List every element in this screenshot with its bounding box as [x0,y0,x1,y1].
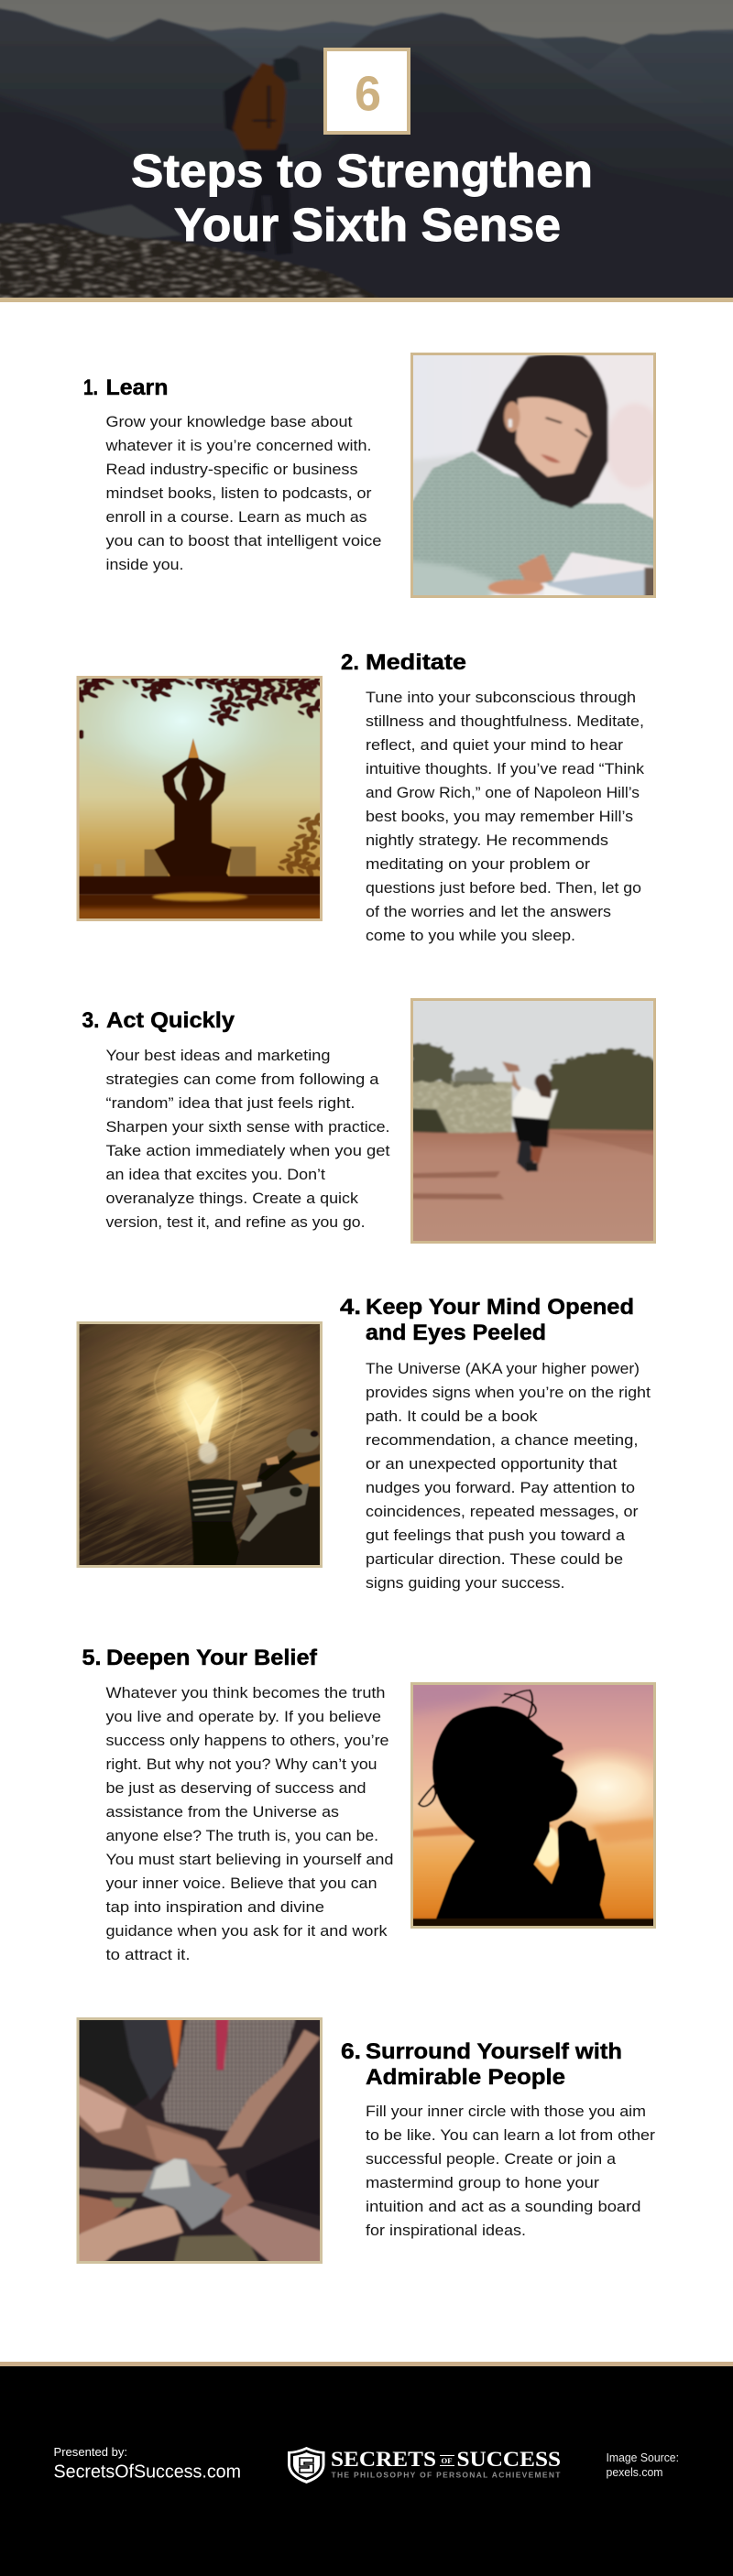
panel: step 1 learn [83,342,671,607]
body text: Your best ideas and marketing [106,1047,330,1064]
body text: “random” idea that just feels right. [106,1094,356,1112]
heading: 2. [341,650,359,675]
body text: mastermind group to hone your [366,2174,599,2191]
body text: you live and operate by. If you believe [106,1708,381,1725]
body text: stillness and thoughtfulness. Meditate, [366,712,644,730]
body text: intuition and act as a sounding board [366,2198,641,2215]
body text: enroll in a course. Learn as much as [106,508,366,526]
heading [340,1295,634,1345]
body text [366,689,645,944]
body text: success only happens to others, you’re [106,1732,388,1749]
wordmark: THE PHILOSOPHY OF PERSONAL ACHIEVEMENT [332,2471,561,2480]
body text: whatever it is you’re concerned with. [104,437,372,454]
heading: Deepen Your Belief [106,1646,318,1670]
photo: woman studying [397,342,671,607]
footer gold bar [0,2362,733,2366]
body text: best books, you may remember Hill’s [366,808,633,825]
body text: be just as deserving of success and [106,1779,366,1797]
logo: secrets of success [288,2447,561,2484]
header banner [0,0,733,309]
body text: nightly strategy. He recommends [366,831,608,849]
title: Steps to Strengthen [131,145,593,197]
image source: Image Source: [607,2451,679,2464]
panel: step 6 surround yourself [63,2009,655,2275]
body text [106,1684,393,1963]
heading: Keep Your Mind Opened [366,1295,634,1320]
heading: 4. [340,1295,361,1320]
presented by: SecretsOfSuccess.com [53,2462,241,2482]
wordmark [331,2448,561,2480]
footer black band [0,2366,733,2576]
image source [607,2451,679,2479]
body text: to attract it. [106,1946,191,1963]
wordmark: OF [442,2457,453,2465]
body text: gut feelings that push you toward a [366,1527,626,1544]
photo: meditating silhouette [63,645,337,931]
body text: for inspirational ideas. [366,2222,526,2239]
body text: questions just before bed. Then, let go [366,879,641,897]
heading: 6. [341,2039,361,2064]
body text: and Grow Rich,” one of Napoleon Hill’s [366,784,640,801]
photo: group of stacked hands [63,2009,337,2275]
footer [0,2362,733,2576]
body text: strategies can come from following a [106,1071,379,1088]
photo: runner on dirt road [397,989,671,1255]
body text: anyone else? The truth is, you can be. [106,1827,378,1844]
heading: and Eyes Peeled [366,1321,546,1345]
body text: version, test it, and refine as you go. [106,1213,365,1231]
body text: meditating on your problem or [366,855,590,873]
heading: Act Quickly [106,1008,235,1033]
body text: your inner voice. Believe that you can [106,1875,377,1892]
body text: mindset books, listen to podcasts, or [106,484,372,502]
body text: Whatever you think becomes the truth [106,1684,385,1701]
heading: Meditate [366,650,466,675]
body text: Sharpen your sixth sense with practice. [106,1118,390,1136]
wordmark: SUCCESS [456,2448,561,2471]
body text: provides signs when you’re on the right [366,1384,651,1401]
heading: 3. [82,1008,99,1033]
body text: intuitive thoughts. If you’ve read “Think [366,760,645,777]
body text: path. It could be a book [366,1408,538,1425]
body text: reflect, and quiet your mind to hear [366,736,623,754]
body text: Take action immediately when you get [106,1142,390,1159]
panel: step 4 keep your mind opened [0,1189,651,1699]
body text: overanalyze things. Create a quick [106,1190,359,1207]
body text [104,413,382,573]
heading [341,2039,622,2090]
body text: to be like. You can learn a lot from other [366,2126,655,2144]
body text: right. But why not you? Why can’t you [106,1755,377,1773]
heading: 1. [83,375,98,400]
heading: Surround Yourself with [366,2039,622,2064]
body text: of the worries and let the answers [366,903,611,920]
number badge [325,49,409,133]
body text: guidance when you ask for it and work [106,1922,388,1940]
title: Your Sixth Sense [174,199,561,251]
body text: You must start believing in yourself and [106,1851,393,1868]
body text: nudges you forward. Pay attention to [366,1479,635,1496]
title [131,145,593,251]
panel: step 3 act quickly [82,989,671,1255]
body text: recommendation, a chance meeting, [366,1431,638,1449]
presented by: Presented by: [53,2445,127,2459]
panel: step 2 meditate [63,645,645,944]
presented by [53,2445,241,2482]
body text: particular direction. These could be [366,1550,623,1568]
body text: Fill your inner circle with those you aim [366,2103,646,2120]
body text [366,2103,655,2239]
heading: Learn [106,375,169,400]
photo: hiker on mountain [0,0,733,298]
heading: Admirable People [366,2065,565,2090]
wordmark: SECRETS [331,2448,436,2471]
body text: inside you. [106,556,183,573]
body text: Grow your knowledge base about [106,413,353,430]
body text: Read industry-specific or business [106,461,357,478]
body text: tap into inspiration and divine [106,1898,324,1916]
heading: 5. [82,1646,101,1670]
body text: assistance from the Universe as [106,1803,339,1821]
image source: pexels.com [607,2466,663,2479]
number badge: 6 [355,66,381,121]
photo: praying silhouette at sunset [401,1676,673,1935]
body text: signs guiding your success. [366,1574,564,1592]
panel: step 5 deepen your belief [82,1646,673,1963]
body text: Tune into your subconscious through [366,689,636,706]
photo: lightbulb and keys [0,1189,528,1699]
body text: you can to boost that intelligent voice [106,532,381,549]
body text: an idea that excites you. Don’t [106,1166,325,1183]
header gold bar [0,298,733,302]
body text: or an unexpected opportunity that [366,1455,618,1473]
body text [366,1360,651,1592]
icon: shield [288,2447,324,2484]
body text: successful people. Create or join a [366,2150,617,2168]
body text: coincidences, repeated messages, or [366,1503,639,1520]
body text [106,1047,390,1231]
body text: The Universe (AKA your higher power) [366,1360,640,1377]
body text: come to you while you sleep. [366,927,575,944]
